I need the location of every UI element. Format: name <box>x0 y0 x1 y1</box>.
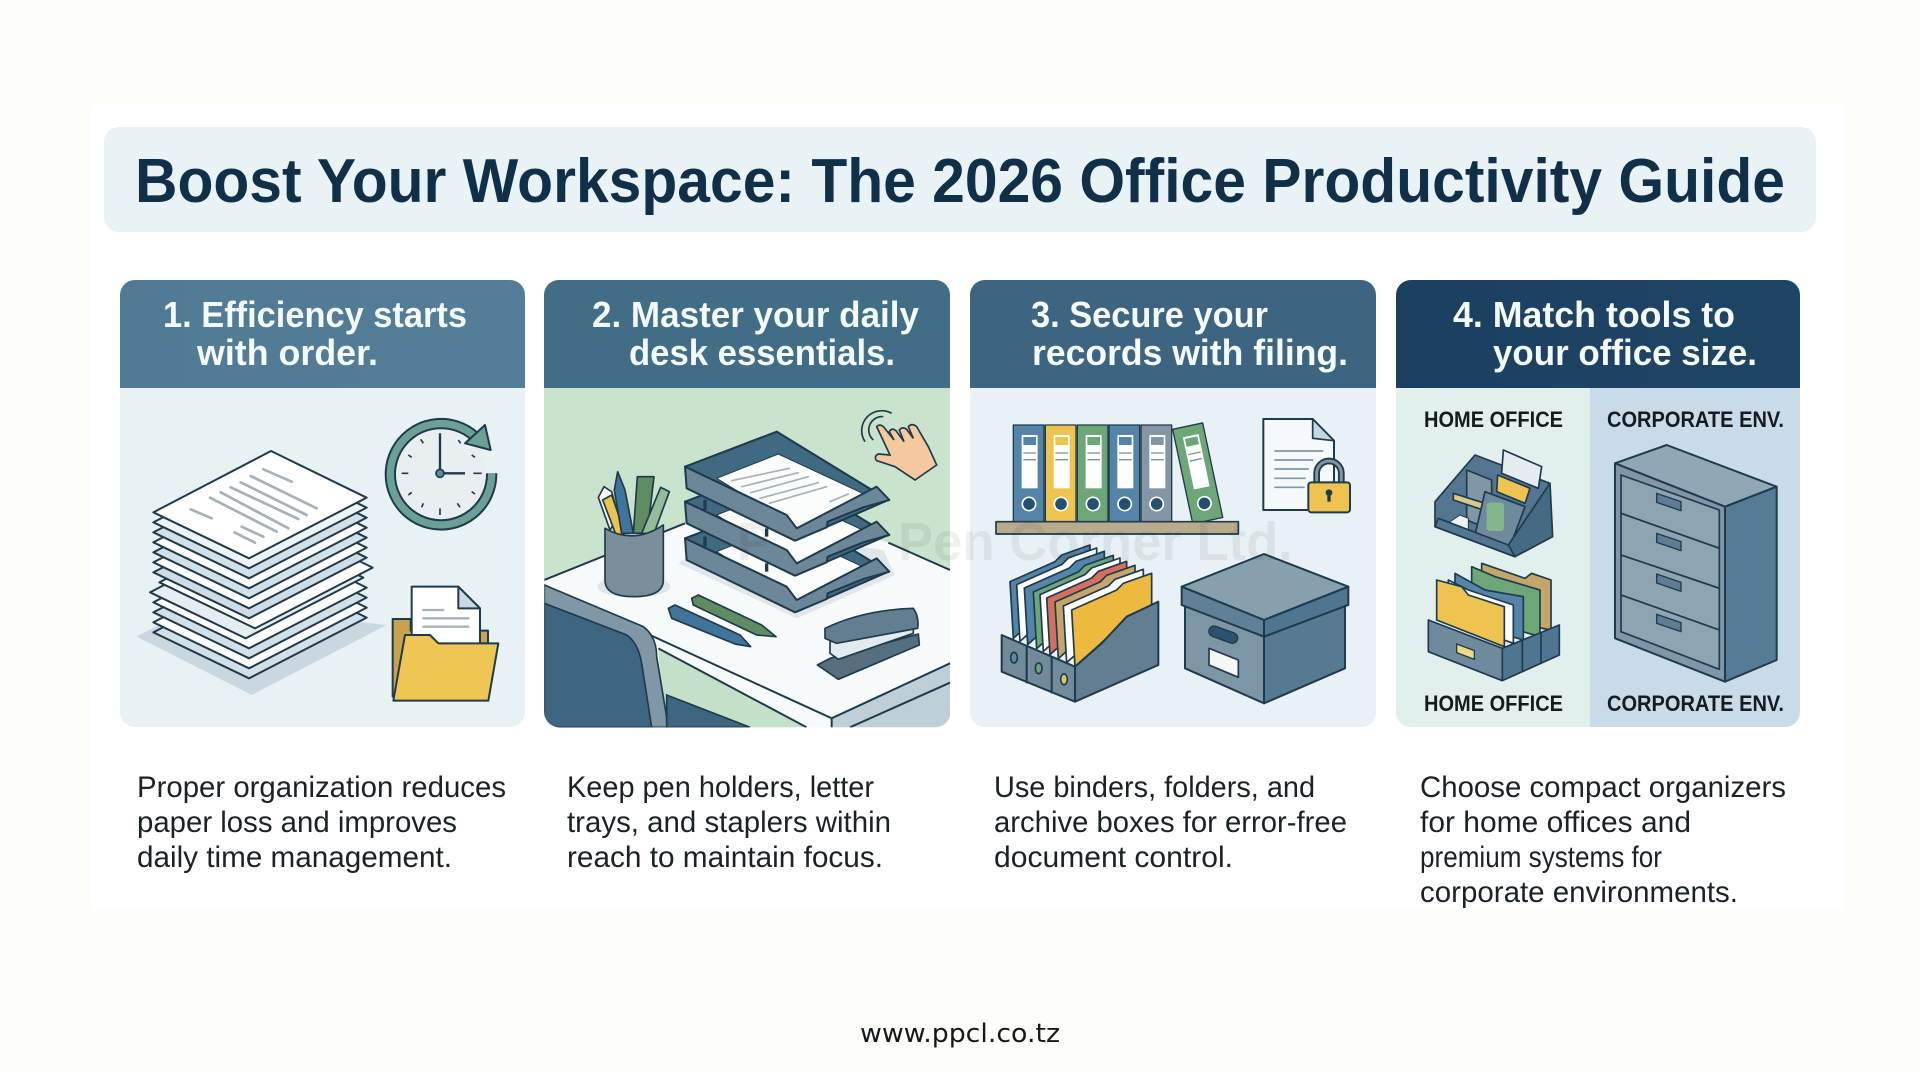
panel 1 header <box>120 280 525 388</box>
icon: desk organizer <box>1435 450 1553 557</box>
panel 3 heading: 3. Secure your <box>1031 294 1268 335</box>
text block: step 4: for home offices and <box>1420 806 1691 839</box>
panel 3 background <box>970 280 1376 727</box>
panel 3 heading: records with filing. <box>1032 332 1348 373</box>
panel 2 illustrations <box>544 411 950 727</box>
panel 3 header <box>970 280 1376 388</box>
labels: home office and corporate <box>1424 407 1784 716</box>
labels: home office and corporate: CORPORATE ENV. <box>1607 691 1784 716</box>
icon: tapping hand <box>862 411 937 480</box>
text block: step 4: corporate environments. <box>1420 876 1738 909</box>
footer url: www.ppcl.co.tz <box>860 1019 1060 1049</box>
panel 4 illustrations <box>1428 445 1777 682</box>
panel 4 heading: your office size. <box>1493 332 1757 373</box>
panel 4 right background <box>1590 388 1800 727</box>
panel 2 background <box>544 280 950 727</box>
text block: step 1: Proper organization reduces <box>137 771 506 804</box>
icon: folder holder <box>1002 545 1158 702</box>
text block: step 2 <box>567 771 891 874</box>
panel 4 left background <box>1396 388 1590 727</box>
panel 3: secure your records with filing <box>970 280 1376 727</box>
panel 1 heading: 1. Efficiency starts <box>163 294 467 335</box>
panel 4: match tools to your office size <box>1396 280 1800 727</box>
panel 1 heading: with order. <box>196 332 378 373</box>
text block: step 4 <box>1420 771 1786 909</box>
panel 3 illustrations <box>996 419 1350 703</box>
stapler <box>817 608 919 679</box>
text block: step 3: archive boxes for error-free <box>994 806 1347 839</box>
icon: clock with arrow <box>390 424 492 525</box>
text block: step 2: reach to maintain focus. <box>567 841 883 874</box>
icon: folder box <box>1428 563 1559 681</box>
panel 2 heading: desk essentials. <box>629 332 895 373</box>
labels: home office and corporate: HOME OFFICE <box>1424 691 1563 716</box>
icon: paper stack <box>137 451 387 695</box>
icon: binders on shelf <box>996 423 1238 534</box>
text block: step 4: premium systems for <box>1420 841 1662 874</box>
text block: step 1: daily time management. <box>137 841 452 874</box>
panel 2 header <box>544 280 950 388</box>
title banner <box>104 127 1816 232</box>
text block: step 1: paper loss and improves <box>137 806 457 839</box>
chair <box>544 585 750 727</box>
text block: step 2: Keep pen holders, letter <box>567 771 874 804</box>
panel 1 illustrations <box>137 424 498 701</box>
letter trays <box>678 432 895 618</box>
text block: step 4: Choose compact organizers <box>1420 771 1786 804</box>
text block: step 1 <box>137 771 506 874</box>
icon: archive box <box>1182 554 1348 703</box>
text block: step 3: document control. <box>994 841 1233 874</box>
icon: yellow folder with document <box>393 587 498 701</box>
panel 1: efficiency starts with order <box>120 280 525 727</box>
panel 1 heading <box>163 294 467 373</box>
pen holder <box>597 472 671 597</box>
watermark: Paper Pen Corner Ltd. <box>737 512 1293 572</box>
panel 2: master your daily desk essentials <box>544 280 950 727</box>
title: Boost Your Workspace: The 2026 Office Productivity Guide <box>135 147 1785 216</box>
desk <box>544 503 950 727</box>
panel 4 header <box>1396 280 1800 388</box>
panel 2 heading: 2. Master your daily <box>592 294 919 335</box>
panel 3 heading <box>1031 294 1348 373</box>
pens <box>668 595 776 647</box>
faint page panel <box>90 105 1845 910</box>
panel 4 heading: 4. Match tools to <box>1453 294 1735 335</box>
labels: home office and corporate: CORPORATE ENV. <box>1607 407 1784 432</box>
text block: step 3: Use binders, folders, and <box>994 771 1315 804</box>
icon: filing cabinet <box>1615 445 1777 682</box>
panel 2 heading <box>592 294 919 373</box>
labels: home office and corporate: HOME OFFICE <box>1424 407 1563 432</box>
panel 4 heading <box>1453 294 1757 373</box>
text block: step 3 <box>994 771 1347 874</box>
panel 1 background <box>120 280 525 727</box>
text block: step 2: trays, and staplers within <box>567 806 891 839</box>
icon: locked document <box>1263 419 1350 512</box>
